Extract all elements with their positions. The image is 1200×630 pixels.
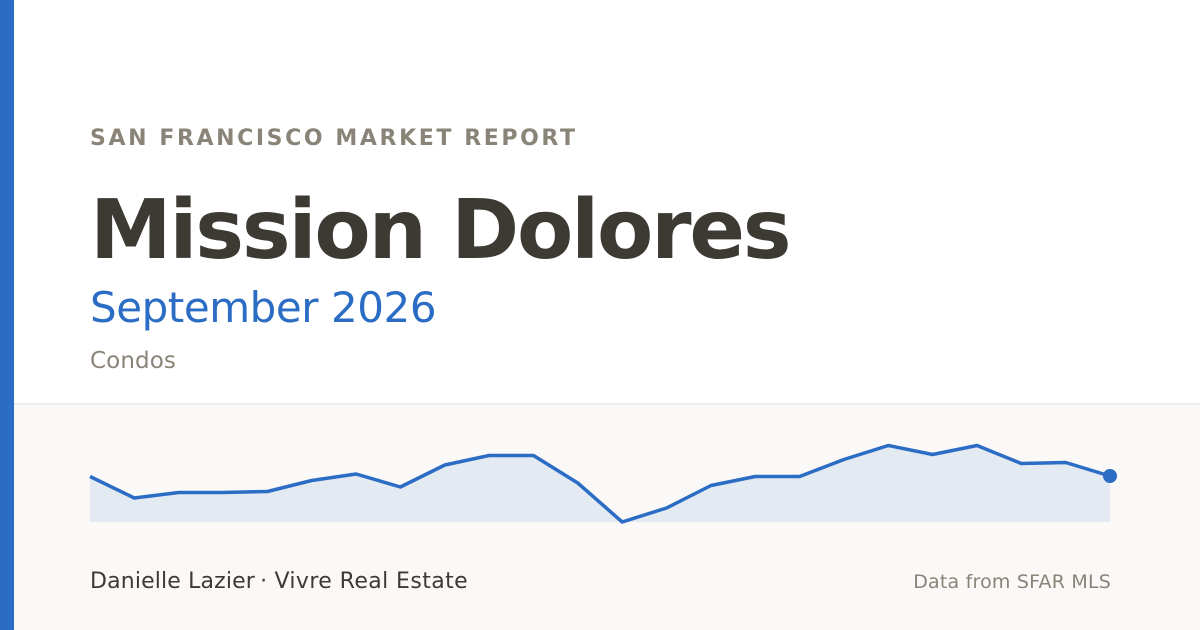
data source: Data from SFAR MLS (913, 571, 1111, 593)
left accent bar (0, 0, 14, 630)
property type: Condos (90, 348, 176, 374)
chart trend line (90, 446, 1110, 522)
title: Mission Dolores (90, 183, 789, 278)
sparkline chart (89, 444, 1117, 524)
latest value marker (1103, 469, 1117, 483)
footer panel (14, 403, 1200, 630)
eyebrow heading: SAN FRANCISCO MARKET REPORT (90, 126, 578, 151)
subtitle: date: September 2026 (90, 283, 436, 332)
agent credit: Danielle Lazier · Vivre Real Estate (90, 569, 468, 594)
chart area fill (90, 446, 1110, 522)
